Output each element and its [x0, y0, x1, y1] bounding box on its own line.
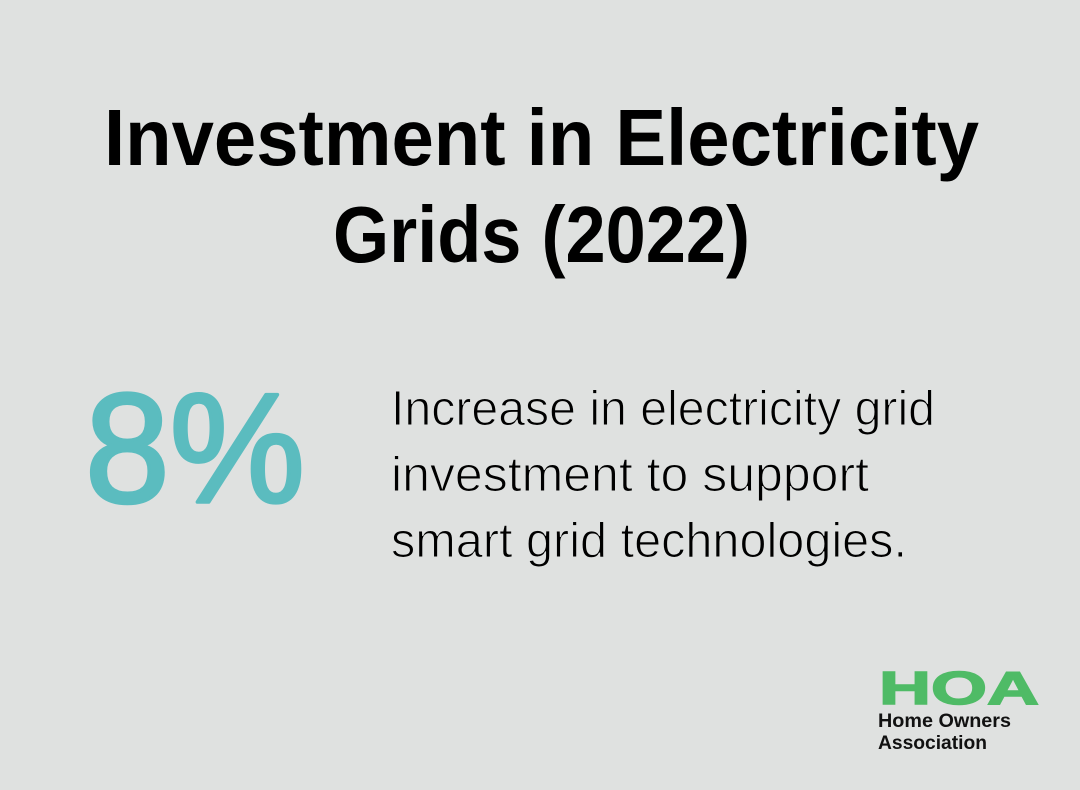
title — [104, 93, 979, 279]
logo wordmark: Association — [878, 733, 987, 754]
logo mark: HOA: HOA — [879, 662, 1039, 714]
description text — [391, 382, 935, 568]
logo wordmark — [878, 711, 1011, 754]
title: Grids (2022) — [333, 190, 750, 279]
title: Investment in Electricity — [104, 93, 979, 182]
description text: Increase in electricity grid — [391, 382, 935, 436]
big statistic: 8%: 8% — [85, 362, 305, 536]
logo: HOA Home Owners Association — [878, 662, 1039, 754]
description text: smart grid technologies. — [391, 514, 907, 568]
logo wordmark: Home Owners — [878, 711, 1011, 732]
description text: investment to support — [391, 448, 869, 502]
